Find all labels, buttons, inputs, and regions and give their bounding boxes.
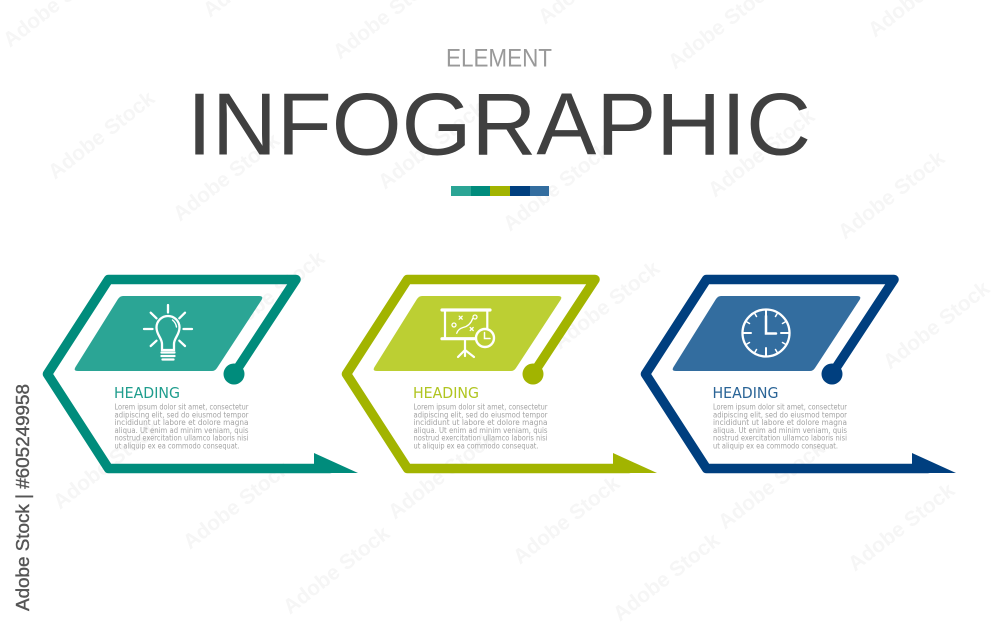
background watermark pattern: Adobe Stock (714, 437, 829, 534)
background watermark pattern: Adobe Stock (509, 472, 624, 569)
body text 2: aliqua. Ut enim ad minim veniam, quis (414, 426, 548, 435)
heading 2: HEADING (413, 384, 479, 402)
body text 2: nostrud exercitation ullamco laboris nisi (414, 434, 548, 442)
image panel 3 (673, 296, 860, 371)
background watermark pattern: Adobe Stock (49, 417, 164, 514)
panel: step 2 (346, 280, 657, 473)
body text 1: nostrud exercitation ullamco laboris nisi (114, 434, 248, 442)
body text 3: aliqua. Ut enim ad minim veniam, quis (713, 426, 847, 435)
watermark id: Adobe Stock | #605249958 (13, 384, 33, 611)
background watermark pattern: Adobe Stock (609, 529, 724, 625)
background watermark pattern: Adobe Stock (549, 257, 664, 354)
background watermark pattern: Adobe Stock (704, 105, 819, 202)
body text 1: ut aliquip ex ea commodo consequat. (114, 441, 240, 450)
body text 2: ut aliquip ex ea commodo consequat. (414, 441, 538, 450)
body text 2: Lorem ipsum dolor sit amet, consectetur (414, 402, 548, 412)
body text 1: aliqua. Ut enim ad minim veniam, quis (114, 426, 248, 435)
body text 3: adipiscing elit, sed do eiusmod tempor (713, 410, 848, 419)
heading 1: HEADING (114, 384, 180, 402)
background watermark pattern: Adobe Stock (214, 247, 329, 344)
body text 2: adipiscing elit, sed do eiusmod tempor (414, 410, 548, 419)
body text 3: nostrud exercitation ullamco laboris nisi (713, 434, 847, 442)
outline arrow 3 (646, 280, 956, 473)
background watermark pattern: Adobe Stock (44, 87, 159, 184)
panel: step 1 (48, 280, 358, 473)
body text 2 (414, 402, 548, 450)
outline arrow 2 (346, 280, 657, 473)
background watermark pattern: Adobe Stock (374, 97, 489, 194)
background watermark pattern: Adobe Stock (499, 139, 614, 236)
body text 3: Lorem ipsum dolor sit amet, consectetur (713, 402, 848, 412)
subtitle: ELEMENT (446, 44, 552, 72)
body text 1: incididunt ut labore et dolore magna (114, 418, 249, 427)
panel: step 3 (646, 280, 956, 473)
background watermark pattern: Adobe Stock (879, 277, 994, 374)
background watermark pattern: Adobe Stock (169, 129, 284, 226)
image panel 2 (374, 296, 561, 371)
background watermark pattern: Adobe Stock (179, 457, 294, 554)
body text 3 (713, 402, 848, 450)
background watermark pattern: Adobe Stock (384, 427, 499, 524)
background watermark pattern: Adobe Stock (844, 479, 959, 576)
body text 2: incididunt ut labore et dolore magna (414, 418, 548, 427)
outline arrow 1 (48, 280, 358, 473)
body text 3: ut aliquip ex ea commodo consequat. (713, 441, 838, 450)
body text 1: Lorem ipsum dolor sit amet, consectetur (114, 402, 249, 412)
heading 3: HEADING (712, 384, 778, 402)
body text 3: incididunt ut labore et dolore magna (713, 418, 847, 427)
image panel 1 (75, 296, 262, 371)
icon: light bulb (144, 305, 192, 360)
title: INFOGRAPHIC (187, 74, 811, 174)
background watermark pattern: Adobe Stock (279, 522, 394, 619)
background watermark pattern: Adobe Stock (834, 147, 949, 244)
icon: clock (742, 310, 790, 356)
colour bar (451, 186, 549, 196)
body text 1 (114, 402, 249, 450)
body text 1: adipiscing elit, sed do eiusmod tempor (114, 410, 249, 419)
icon: presentation board (442, 310, 494, 357)
